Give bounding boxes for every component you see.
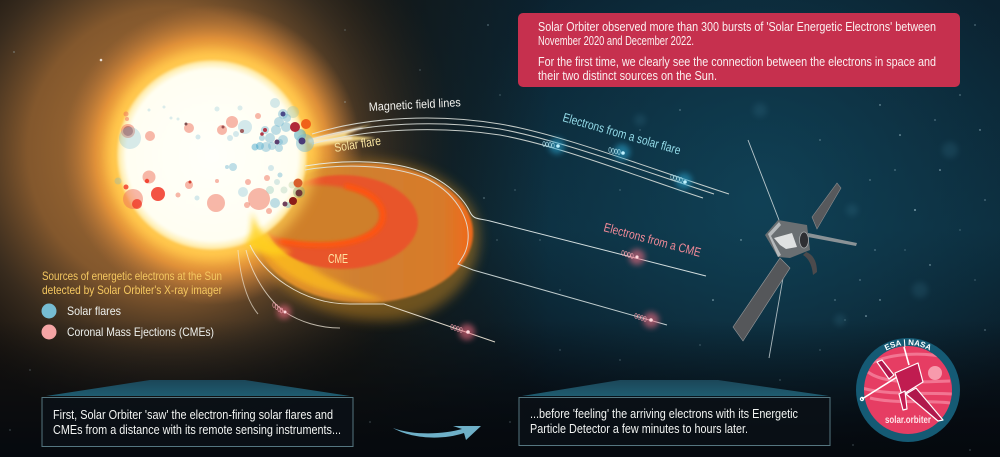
electron on lower CME line: [451, 324, 475, 340]
step text: [53, 408, 341, 437]
legend: [42, 269, 222, 340]
spacecraft body: [765, 220, 810, 258]
solar panel lower: [733, 258, 790, 341]
label: CME: CME: [328, 251, 348, 266]
label: electrons from a solar flare: Electrons from a solar flare: [561, 110, 682, 158]
heat shield highlights: [774, 233, 797, 249]
badge top text: ESA | NASA: [884, 339, 930, 350]
lower antenna: [769, 278, 783, 358]
legend item: solar flares: Solar flares: [67, 304, 121, 318]
callout text: [538, 20, 936, 83]
legend item: solar flares: [42, 304, 121, 318]
sunspot source bubbles: red, CME sources: [121, 112, 272, 214]
electron 1: [543, 138, 565, 154]
sunspot source bubbles: blue, solar flare sources: [114, 98, 314, 208]
CME bright crescent: [280, 186, 383, 245]
badge ring: [856, 338, 960, 442]
instrument ring: [800, 232, 808, 248]
panel: remote sensing step: [42, 380, 353, 446]
electron 3: [671, 173, 692, 189]
electron on middle CME line: [635, 312, 659, 328]
callout text: Solar Orbiter observed more than 300 bursts of 'Solar Energetic Electrons' between: [538, 20, 936, 34]
step text: First, Solar Orbiter 'saw' the electron-firing solar flares and: [53, 408, 333, 422]
legend heading: [42, 269, 222, 297]
callout text: For the first time, we clearly see the connection between the electrons in space and: [538, 55, 936, 69]
callout: key finding: [518, 13, 960, 87]
label: solar flare: Solar flare: [333, 134, 382, 155]
electron on upper CME line: [622, 249, 645, 265]
upper antenna: [748, 140, 779, 220]
electrons from a solar flare: [543, 138, 692, 189]
electron near sun: [273, 303, 291, 319]
CME inner red shell: [266, 175, 418, 269]
legend item: CMEs: Coronal Mass Ejections (CMEs): [67, 325, 214, 339]
view cone: [46, 380, 350, 396]
label: electrons from a CME: Electrons from a CME: [602, 220, 702, 260]
step text: CMEs from a distance with its remote sensing instruments...: [53, 423, 341, 437]
CME yellow lower band: [254, 232, 385, 300]
solar flare rays: [308, 124, 376, 147]
mission badge: [856, 338, 960, 442]
callout text: November 2020 and December 2022.: [538, 34, 694, 48]
Solar Orbiter spacecraft: [733, 140, 857, 358]
rear arm: [803, 252, 817, 275]
legend heading: detected by Solar Orbiter's X-ray imager: [42, 283, 222, 297]
sun limb swoosh over CME: [246, 212, 292, 255]
arrow between steps: [393, 426, 481, 440]
boom: [808, 233, 857, 246]
view cone: [522, 380, 829, 396]
text box: [519, 398, 830, 446]
CME body: [257, 163, 473, 303]
badge bottom text: solar.orbiter: [885, 415, 931, 426]
label: magnetic field lines: Magnetic field lines: [368, 95, 461, 114]
CME outer glow: [250, 160, 479, 321]
sun disc: [117, 60, 307, 250]
CME inner hollow: [256, 185, 380, 245]
panel: particle detector step: [519, 380, 830, 446]
electron 2: [609, 144, 630, 160]
step text: ...before 'feeling' the arriving electrons with its Energetic: [530, 407, 798, 421]
legend heading: Sources of energetic electrons at the Sun: [42, 269, 222, 283]
text box: [42, 398, 353, 446]
sun corona: [108, 51, 316, 259]
step text: [530, 407, 798, 436]
sunspot source bubbles: dark overlaps: [184, 112, 311, 206]
electrons from a CME: [273, 249, 659, 340]
sun: [108, 51, 316, 259]
step text: Particle Detector a few minutes to hours later.: [530, 422, 748, 436]
callout text: their two distinct sources on the Sun.: [538, 69, 717, 83]
badge disc: [864, 346, 952, 434]
solar panel upper: [812, 183, 841, 229]
nebula speckles: [634, 60, 958, 326]
magnetic field lines: CME: [238, 162, 706, 342]
badge orbit stripes: [862, 354, 952, 403]
badge spacecraft: [860, 347, 943, 421]
CME: coronal mass ejection: [250, 160, 479, 321]
magnetic field lines: solar flare: [312, 118, 729, 198]
